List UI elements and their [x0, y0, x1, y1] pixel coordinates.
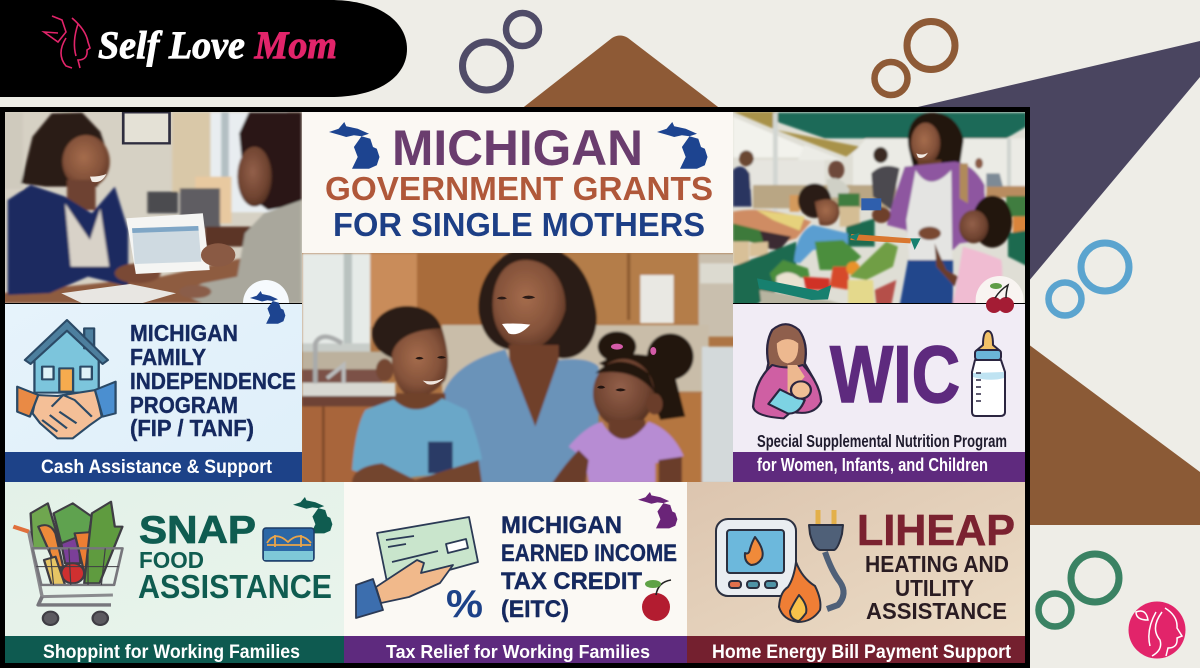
girl — [598, 331, 636, 362]
icon: shopping cart with produce — [13, 502, 122, 625]
heading: WIC: WIC — [830, 330, 960, 420]
LIHEAP heading: LIHEAP — [857, 506, 1015, 555]
program name: INDEPENDENCE — [130, 368, 296, 394]
panel: Michigan Earned Income Tax Credit — [344, 482, 687, 663]
food label: FOOD — [139, 547, 204, 573]
icon: EBT card with bridge — [263, 528, 314, 561]
program name: PROGRAM — [130, 392, 238, 418]
icon: cherry badge — [986, 283, 1014, 313]
panel: Michigan Family Independence Program — [5, 291, 302, 482]
title panel — [302, 112, 733, 253]
LIHEAP description — [865, 551, 1009, 624]
program name: MICHIGAN — [501, 512, 622, 539]
vegetables — [815, 240, 861, 270]
decorative rings: slate — [462, 13, 539, 90]
caption bar — [5, 636, 344, 663]
title line 1: MICHIGAN — [392, 120, 643, 176]
background shape: brown triangle — [1028, 344, 1200, 525]
LIHEAP description: UTILITY — [895, 575, 974, 601]
icon: Michigan map right — [657, 122, 708, 169]
caption bar — [344, 636, 687, 663]
panel: LIHEAP — [687, 482, 1025, 663]
boy — [798, 183, 831, 218]
background shape: brown peak — [520, 36, 722, 110]
background shape: slate wedge — [905, 41, 1200, 282]
program name — [130, 320, 296, 441]
icon: Michigan map — [638, 492, 677, 528]
icon: Michigan map badge — [250, 291, 285, 324]
woman — [908, 113, 964, 167]
mother — [478, 247, 597, 358]
caption bar: Shoppint for Working Families — [43, 642, 300, 663]
decorative rings: brown — [874, 22, 955, 95]
SNAP heading: SNAP — [139, 509, 256, 552]
program name: (EITC) — [501, 596, 569, 623]
black frame — [0, 107, 1030, 668]
program name: TAX CREDIT — [501, 568, 642, 595]
icon: cherry — [642, 580, 671, 621]
icon: baby bottle — [972, 331, 1005, 416]
program name: (FIP / TANF) — [130, 415, 254, 441]
logo icon: leaf and face — [44, 16, 90, 68]
icon: Michigan map — [293, 497, 332, 533]
caption bar: Cash Assistance & Support — [41, 457, 273, 478]
decorative rings: blue — [1048, 243, 1129, 316]
icon: flame — [779, 562, 820, 622]
caption bar: Tax Relief for Working Families — [386, 641, 650, 662]
photo: caseworker meeting with client — [0, 112, 302, 303]
program name: MICHIGAN — [130, 320, 238, 346]
caption bar: for Women, Infants, and Children — [757, 455, 988, 475]
panel: SNAP food assistance — [5, 482, 344, 663]
assistance label: ASSISTANCE — [138, 568, 332, 605]
panel: WIC — [733, 283, 1025, 482]
girl — [972, 196, 1012, 248]
icon: hand holding check — [356, 517, 478, 618]
title line 3: FOR SINGLE MOTHERS — [333, 206, 705, 243]
photo: mother and children at farmers market — [733, 112, 1025, 303]
decorative rings: green — [1038, 554, 1119, 626]
icon: Michigan map left — [329, 122, 380, 169]
corner badge: pink logo circle — [1128, 602, 1186, 658]
LIHEAP description: HEATING AND — [865, 551, 1009, 577]
icon: mother nursing — [753, 324, 821, 418]
title line 2: GOVERNMENT GRANTS — [325, 170, 713, 207]
boy — [372, 306, 442, 361]
icon: power plug — [809, 510, 844, 609]
icon: thermostat — [716, 519, 796, 596]
caption bar: Home Energy Bill Payment Support — [712, 642, 1012, 663]
icon: house and handshake — [17, 320, 116, 438]
program name — [501, 512, 677, 623]
caption bar — [733, 452, 1025, 482]
photo: mother with two children in kitchen — [302, 247, 735, 483]
WIC description: Special Supplemental Nutrition Program — [757, 431, 1007, 451]
header logo bar — [0, 0, 407, 97]
program name: FAMILY — [130, 344, 206, 370]
logo wordmark: Self Love Mom — [98, 24, 337, 67]
LIHEAP description: ASSISTANCE — [866, 598, 1007, 624]
caption bar — [5, 452, 302, 482]
percent sign: % — [446, 583, 483, 626]
program name: EARNED INCOME — [501, 540, 677, 567]
